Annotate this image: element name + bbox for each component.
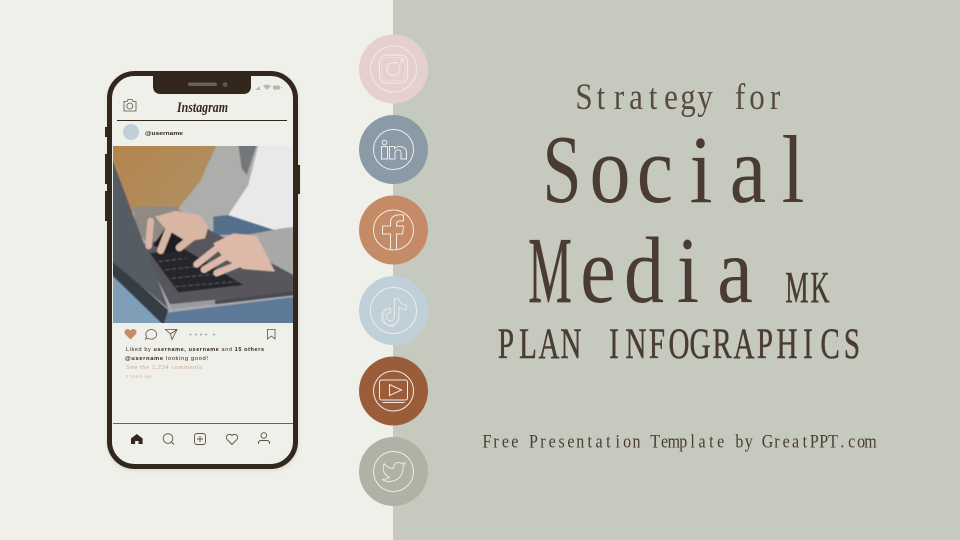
- likes line: Liked by username, username and 15 others: [126, 347, 264, 353]
- icon: heart filled: [124, 329, 137, 340]
- phone side buttons: [105, 127, 300, 221]
- icon: instagram: [359, 34, 428, 104]
- instagram wordmark: Instagram: [176, 100, 228, 116]
- icon: facebook: [359, 196, 428, 264]
- icon: tiktok: [359, 276, 428, 345]
- icon: add: [194, 434, 206, 444]
- carousel dots: [190, 334, 215, 336]
- right background panel: [393, 0, 960, 540]
- post caption text: [125, 347, 264, 378]
- post action icons: [124, 329, 275, 340]
- icon: search: [163, 434, 174, 444]
- avatar: [123, 124, 139, 140]
- Social letters: ocial: [589, 117, 804, 224]
- icon: bookmark: [268, 330, 275, 339]
- phone mockup: [105, 74, 300, 470]
- heading: Social: [543, 116, 804, 224]
- status bar icons: [255, 84, 282, 90]
- heading: PLAN INFOGRAPHICS: PLAN INFOGRAPHICS: [498, 319, 860, 367]
- left background panel: [0, 0, 393, 540]
- right hand: [197, 233, 275, 273]
- phone body: [110, 74, 296, 466]
- camera icon: [124, 100, 136, 111]
- caption line: @username looking good!: [125, 356, 208, 362]
- timestamp: 3 hours ago: [126, 374, 153, 378]
- heading: Strategy for: Strategy for: [575, 76, 781, 118]
- Media letters: edia: [580, 218, 753, 322]
- icon: heart: [226, 434, 238, 444]
- comments link: See the 1,234 comments: [126, 365, 202, 371]
- heading: Media MK: [528, 218, 829, 323]
- icon: linkedin: [359, 115, 428, 184]
- icon: comment: [146, 329, 157, 339]
- subtitle: template credit: Free Presentation Template by GreatPPT.com: [483, 430, 877, 452]
- icon: profile: [258, 433, 270, 444]
- bottom nav divider: [113, 423, 293, 424]
- Media letter M: M: [528, 219, 572, 323]
- icon: twitter: [359, 437, 428, 506]
- social icon column: [359, 34, 428, 506]
- icon: home: [131, 434, 143, 444]
- username: @username: [145, 131, 183, 137]
- bottom navigation icons: [131, 433, 270, 444]
- header divider: [117, 120, 287, 121]
- left hand: [149, 211, 208, 250]
- icon: send: [166, 330, 177, 340]
- Social letter S: S: [543, 116, 581, 224]
- MK: MK: [785, 263, 829, 312]
- phone notch: [153, 75, 251, 94]
- post photo: hands typing on laptop: [110, 145, 297, 325]
- icon: youtube: [359, 356, 428, 426]
